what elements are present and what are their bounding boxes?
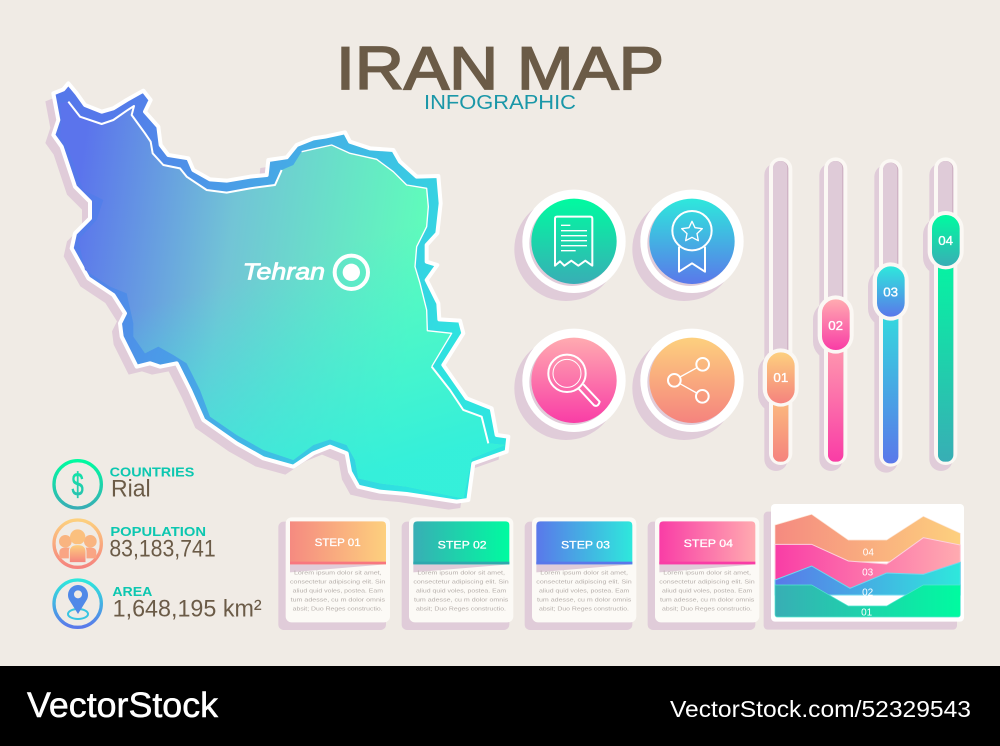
card: step 01: consectetur adipiscing elit. Sin xyxy=(290,579,385,585)
fact: population xyxy=(54,520,216,567)
card: step 02: STEP 02 xyxy=(438,539,487,551)
footer bar: VectorStock.com/52329543 xyxy=(670,696,971,722)
button: receipt xyxy=(514,190,626,301)
slider 03: 03 xyxy=(883,285,898,300)
card: step 04: consectetur adipiscing elit. Sin xyxy=(659,579,755,585)
chart labels: 02 xyxy=(862,588,874,599)
card: step 01: tum adesse, cu m dolor omnis xyxy=(291,597,385,603)
layer 04 xyxy=(775,514,960,562)
card: step 03: aliud quid voles, postea. Eam xyxy=(539,588,630,594)
card: step 03 xyxy=(525,517,636,630)
fact: population: 83,183,741 xyxy=(109,536,216,563)
card: step 02: tum adesse, cu m dolor omnis xyxy=(414,597,509,603)
button: share xyxy=(632,329,744,440)
footer bar: VectorStock xyxy=(27,686,219,725)
card: step 01: STEP 01 xyxy=(315,537,361,549)
layer 01 xyxy=(775,585,960,617)
card: step 03: tum adesse, cu m dolor omnis xyxy=(537,597,632,603)
layer 02 xyxy=(775,562,960,595)
layer 03 xyxy=(775,538,960,588)
title: IRAN MAP xyxy=(336,35,664,102)
slider 02: 02 xyxy=(828,318,843,333)
chart labels: 04 xyxy=(863,548,874,559)
footer bar xyxy=(0,666,1000,746)
fact: currency: COUNTRIES xyxy=(110,465,194,480)
card: step 02: Lorem ipsum dolor sit amet, xyxy=(417,570,506,576)
fact: area: AREA xyxy=(112,584,153,599)
area chart xyxy=(764,504,964,630)
card: step 01: absit; Duo Reges constructio. xyxy=(293,606,383,612)
capital label: Tehran xyxy=(243,258,325,284)
card: step 04: Lorem ipsum dolor sit amet, xyxy=(663,570,752,576)
capital marker xyxy=(335,256,368,289)
card: step 04: STEP 04 xyxy=(684,538,733,550)
card: step 01: Lorem ipsum dolor sit amet, xyxy=(294,570,382,576)
fact: currency: $ xyxy=(72,466,84,502)
card: step 02: aliud quid voles, postea. Eam xyxy=(416,588,507,594)
slider 04 xyxy=(923,157,964,471)
chart labels xyxy=(861,548,874,619)
card: step 03: STEP 03 xyxy=(561,539,610,551)
fact: area: 1,648,195 km² xyxy=(113,596,262,623)
fact: currency: Rial xyxy=(111,476,151,503)
card: step 04: tum adesse, cu m dolor omnis xyxy=(660,597,755,603)
fact: area xyxy=(54,580,262,627)
card: step 03: consectetur adipiscing elit. Sin xyxy=(536,579,632,585)
button: magnifier xyxy=(514,329,626,440)
subtitle: INFOGRAPHIC xyxy=(424,92,576,114)
chart card xyxy=(764,504,964,630)
sliders xyxy=(758,157,964,473)
slider 01 xyxy=(758,157,799,471)
chart labels: 01 xyxy=(861,608,873,619)
card: step 03: absit; Duo Reges constructio. xyxy=(539,606,630,612)
card: step 04: aliud quid voles, postea. Eam xyxy=(662,588,753,594)
card: step 02: consectetur adipiscing elit. Sin xyxy=(413,579,509,585)
card: step 04: absit; Duo Reges constructio. xyxy=(662,606,753,612)
card: step 02 xyxy=(402,517,513,630)
fact: population: POPULATION xyxy=(110,524,206,539)
slider 01: 01 xyxy=(773,370,788,385)
card: step 03: Lorem ipsum dolor sit amet, xyxy=(540,570,629,576)
card: step 02: absit; Duo Reges constructio. xyxy=(416,606,507,612)
slider 04: 04 xyxy=(938,233,954,248)
slider 03 xyxy=(868,159,909,473)
map body xyxy=(53,83,508,502)
step cards xyxy=(278,517,759,630)
map of Iran xyxy=(45,83,508,510)
fact: currency xyxy=(54,461,194,508)
card: step 01 xyxy=(278,517,390,630)
key facts xyxy=(54,461,262,627)
chart labels: 03 xyxy=(862,568,874,579)
slider 02 xyxy=(813,157,854,471)
button: medal xyxy=(632,190,744,301)
card: step 01: aliud quid voles, postea. Eam xyxy=(293,588,383,594)
card: step 04 xyxy=(648,517,759,630)
icon buttons xyxy=(514,190,744,440)
map shadow xyxy=(45,91,500,510)
